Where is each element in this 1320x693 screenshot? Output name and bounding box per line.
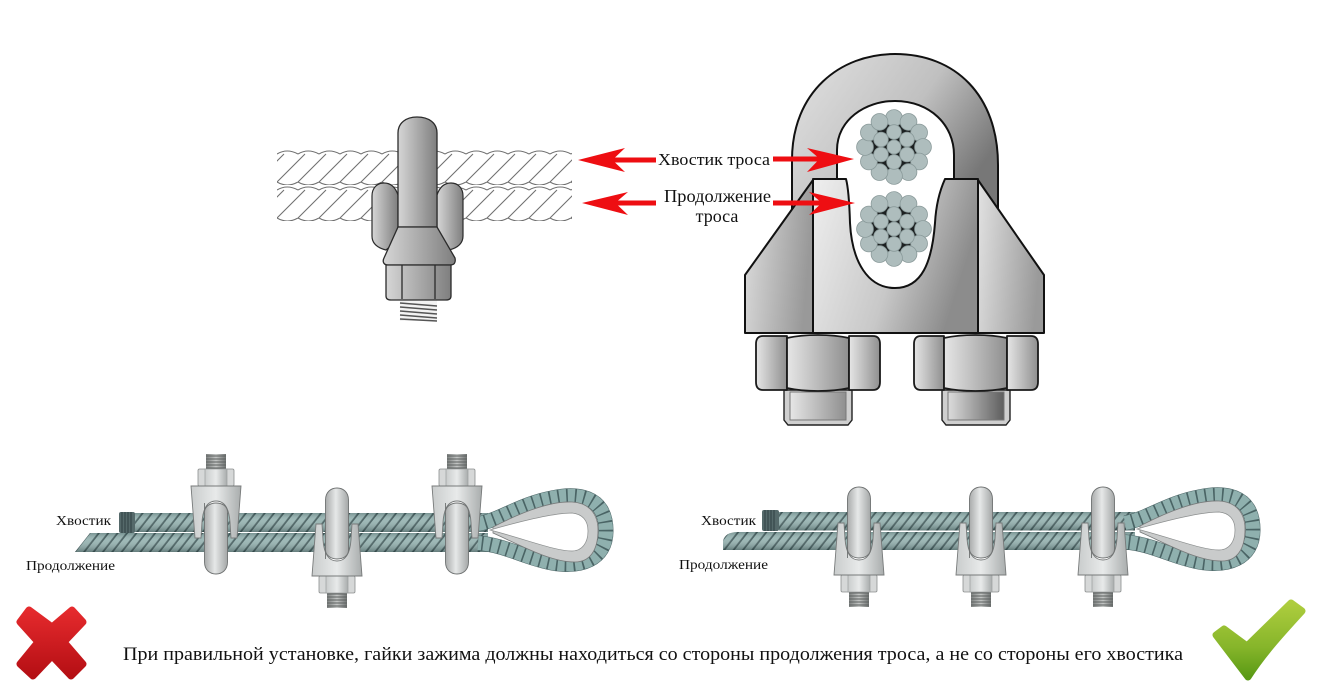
- arrow: left main line: [582, 192, 656, 215]
- main rope: [723, 532, 1135, 550]
- label: rope continuation: троса: [696, 206, 738, 226]
- label: tail, left diagram: Хвостик: [56, 513, 111, 528]
- rope cross-section: main line: [857, 192, 931, 266]
- label: continuation, right diagram: Продолжение: [679, 557, 768, 572]
- rope clamp side view: [277, 117, 572, 321]
- u-bolt opening: [837, 101, 954, 300]
- rope end cap: [119, 512, 135, 533]
- clamp 1: [834, 487, 884, 607]
- arrow: right tail: [773, 148, 854, 172]
- hatched rope: two strands: [277, 150, 572, 221]
- label: rope continuation: [664, 186, 771, 226]
- saddle centre: [813, 179, 978, 333]
- tail rope: [133, 513, 488, 532]
- icon: green check: [1216, 603, 1302, 677]
- left nut: [756, 335, 880, 391]
- u-bolt end: [398, 117, 437, 227]
- arrow: right main line: [773, 192, 855, 215]
- label: tail, right diagram: Хвостик: [701, 513, 756, 528]
- right nut: [914, 335, 1038, 391]
- saddle trapezoid: [383, 227, 455, 265]
- rope end cap: [762, 510, 779, 531]
- clamp 2: [956, 487, 1006, 607]
- u-bolt: [792, 54, 998, 215]
- tail rope: [779, 512, 1135, 530]
- label: rope continuation: Продолжение: [664, 186, 771, 206]
- clamp 3: [432, 454, 482, 574]
- main clamp cross-section: [745, 54, 1044, 425]
- label: tail of rope: Хвостик троса: [658, 150, 770, 169]
- caption: При правильной установке, гайки зажима должны находиться со стороны продолжения троса, а не со стороны его хвостика: [123, 644, 1184, 665]
- thimble eye: [1125, 495, 1253, 563]
- rope cross-section: tail: [857, 110, 931, 184]
- saddle left wing: [745, 180, 813, 333]
- arrow: left tail: [578, 148, 656, 172]
- right bolt: [942, 390, 1010, 425]
- label: continuation, left diagram: Продолжение: [26, 558, 115, 573]
- main rope: [75, 533, 488, 552]
- saddle right wing: [978, 180, 1044, 333]
- diagram: incorrect installation: [75, 454, 606, 608]
- left bolt: [784, 390, 852, 425]
- diagram: correct installation: [723, 487, 1253, 607]
- clamp 3: [1078, 487, 1128, 607]
- icon: red cross: [20, 610, 83, 676]
- side ears: [372, 183, 463, 250]
- clamp 1: [191, 454, 241, 574]
- nut: [386, 265, 451, 300]
- thimble eye: [478, 496, 606, 564]
- clamp 2: [312, 488, 362, 608]
- thread: [400, 300, 437, 321]
